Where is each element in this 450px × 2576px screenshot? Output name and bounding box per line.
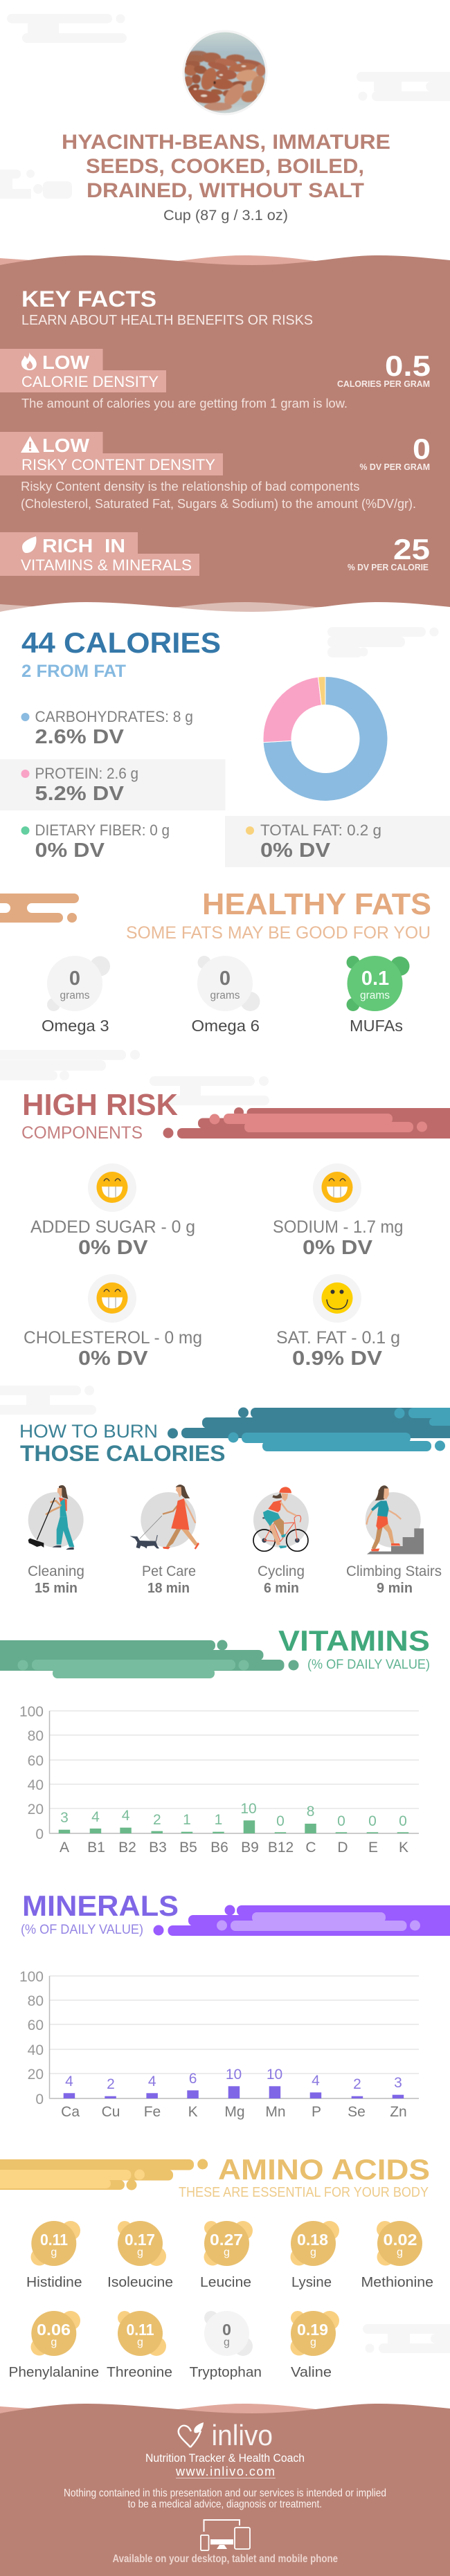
risk: cholesterol: CHOLESTEROL - 0 mg — [24, 1328, 202, 1348]
bar chart: minerals: 6 — [189, 2071, 197, 2087]
amino acid: methionine — [361, 2221, 433, 2290]
heading: those calories: THOSE CALORIES — [20, 1441, 226, 1466]
decoration: amino acids — [0, 2159, 208, 2190]
amino acid: histidine: 0.11 — [40, 2231, 68, 2249]
title: HYACINTH-BEANS, IMMATURE — [62, 131, 390, 154]
amino acid: lysine: Lysine — [291, 2275, 332, 2290]
bar chart: minerals: 4 — [312, 2073, 320, 2089]
macro: total fat — [225, 816, 450, 867]
bar chart: vitamins: B1 — [87, 1840, 105, 1856]
amino acid: histidine — [26, 2221, 82, 2290]
icon: warning triangle — [21, 436, 39, 453]
heading: minerals: MINERALS — [22, 1889, 179, 1922]
disclaimer: to be a medical advice, diagnosis or treatment. — [127, 2498, 322, 2510]
activity: pet care: 18 min — [147, 1581, 190, 1596]
bar chart: minerals: 80 — [28, 1993, 44, 2009]
fact: calorie density: CALORIES PER GRAM — [337, 379, 430, 389]
macro: total fat: TOTAL FAT: 0.2 g — [260, 822, 381, 839]
fat: omega 6: grams — [210, 990, 240, 1001]
bar chart: minerals: Ca — [61, 2104, 80, 2120]
risk: saturated fat: 0.9% DV — [292, 1348, 383, 1370]
macro: carbohydrates — [21, 708, 193, 748]
availability note: Available on your desktop, tablet and mobile phone — [112, 2553, 338, 2565]
icon: grinning face — [321, 1172, 353, 1203]
bar chart: minerals: 100 — [19, 1969, 44, 1985]
bar chart: minerals: 20 — [28, 2067, 44, 2083]
heading: amino acids: AMINO ACIDS — [218, 2153, 430, 2186]
fat: MUFAs: MUFAs — [350, 1017, 403, 1035]
macro: protein: 5.2% DV — [35, 783, 125, 805]
bar chart: vitamins: C — [305, 1840, 316, 1856]
bar chart: vitamins: 0 — [337, 1813, 345, 1829]
bar chart: vitamins: 1 — [215, 1812, 222, 1828]
activity: cleaning: Cleaning — [28, 1563, 84, 1579]
amino acid: histidine: g — [51, 2247, 57, 2258]
amino acid: valine: 0.19 — [297, 2321, 328, 2339]
fat: omega 3: 0 — [69, 968, 80, 990]
logo — [179, 2419, 273, 2451]
macro: protein: PROTEIN: 2.6 g — [35, 765, 138, 782]
fat: MUFAs — [346, 956, 410, 1035]
heading: calories: 44 CALORIES — [21, 626, 221, 659]
decoration: minerals — [154, 1905, 450, 1936]
heading: key facts: KEY FACTS — [21, 287, 156, 311]
website link: www.inlivo.com — [175, 2465, 275, 2478]
activity: climbing stairs: Climbing Stairs — [346, 1563, 442, 1579]
fact: rich in vitamins and minerals: VITAMINS & MINERALS — [21, 556, 192, 574]
icon: grinning face — [97, 1282, 127, 1314]
fact: risky content density: (Cholesterol, Saturated Fat, Sugars & Sodium) to the amount (%DV/gr). — [21, 497, 416, 511]
amino acid: tryptophan: 0 — [222, 2321, 231, 2339]
icon: grinning face — [97, 1172, 127, 1203]
risk: added sugar: ADDED SUGAR - 0 g — [30, 1217, 195, 1237]
bar chart: vitamins: 0 — [368, 1813, 377, 1829]
amino acid: lysine: 0.18 — [297, 2231, 328, 2249]
amino acid: threonine: g — [137, 2337, 143, 2348]
heading: high risk: HIGH RISK — [22, 1088, 178, 1122]
risk: saturated fat: SAT. FAT - 0.1 g — [276, 1328, 400, 1348]
bar chart: minerals: 3 — [394, 2075, 402, 2091]
bar chart: vitamins: B12 — [268, 1840, 294, 1856]
macro: carbohydrates: 2.6% DV — [35, 726, 125, 748]
amino acid: phenylalanine: Phenylalanine — [8, 2365, 99, 2380]
bar chart: minerals — [19, 1969, 419, 2120]
bar chart: vitamins: B3 — [149, 1840, 167, 1856]
bar chart: minerals: 4 — [148, 2074, 156, 2089]
serving size: Cup (87 g / 3.1 oz) — [163, 208, 288, 224]
activity: cleaning — [28, 1485, 84, 1596]
fact: rich in vitamins and minerals: RICH IN — [42, 535, 125, 556]
bar chart: vitamins: B6 — [210, 1840, 228, 1856]
amino acid: lysine — [291, 2221, 339, 2290]
subheading: calories from fat: 2 FROM FAT — [21, 662, 126, 681]
amino acid: phenylalanine: 0.06 — [37, 2321, 71, 2339]
bar chart: minerals: Zn — [390, 2104, 407, 2120]
bar chart: vitamins: K — [399, 1840, 408, 1856]
bar chart: vitamins: D — [337, 1840, 348, 1856]
donut chart — [263, 677, 388, 801]
panel: key facts — [0, 255, 450, 623]
subheading: healthy fats: SOME FATS MAY BE GOOD FOR YOU — [126, 923, 431, 943]
bar chart: vitamins: 1 — [183, 1812, 191, 1828]
bar chart: vitamins: B9 — [241, 1840, 259, 1856]
activity: climbing stairs: 9 min — [377, 1581, 413, 1596]
amino acid: lysine: g — [310, 2247, 316, 2258]
amino acid: threonine: Threonine — [107, 2365, 172, 2380]
bar chart: minerals: 10 — [226, 2067, 242, 2083]
disclaimer: Nothing contained in this presentation and our services is intended or implied — [64, 2487, 386, 2499]
amino acid: leucine: g — [224, 2247, 230, 2258]
bar chart: vitamins: B5 — [179, 1840, 197, 1856]
amino acid: leucine: 0.27 — [210, 2231, 243, 2249]
risk: sodium: SODIUM - 1.7 mg — [273, 1217, 403, 1237]
panel: footer — [0, 2404, 450, 2576]
icon: smiling face — [321, 1282, 353, 1314]
activity: cleaning: 15 min — [35, 1581, 78, 1596]
fact: rich in vitamins and minerals: 25 — [393, 533, 430, 565]
amino acid: valine: g — [310, 2337, 316, 2348]
amino acid: valine: Valine — [291, 2365, 332, 2380]
bar chart: minerals: Mn — [265, 2104, 286, 2120]
bar chart: vitamins: 3 — [60, 1810, 69, 1826]
risk: cholesterol — [24, 1274, 202, 1370]
bar chart: minerals: 10 — [267, 2067, 282, 2083]
fat: MUFAs: 0.1 — [361, 968, 389, 990]
heading: healthy fats: HEALTHY FATS — [202, 887, 431, 921]
fat: omega 6: Omega 6 — [191, 1017, 260, 1035]
disclaimer — [64, 2487, 386, 2510]
amino acid: leucine: Leucine — [200, 2275, 251, 2290]
macro: carbohydrates: CARBOHYDRATES: 8 g — [35, 708, 193, 725]
amino acid: phenylalanine: g — [51, 2337, 57, 2348]
bar chart: vitamins: 60 — [28, 1753, 44, 1769]
fact: rich in vitamins and minerals: % DV PER CALORIE — [348, 562, 429, 572]
amino acid: isoleucine — [107, 2221, 173, 2290]
bar chart: vitamins: 20 — [28, 1802, 44, 1817]
fact: risky content density — [0, 432, 431, 511]
macro: dietary fiber — [21, 822, 170, 862]
fact: risky content density: 0 — [413, 433, 431, 465]
fact: calorie density: CALORIE DENSITY — [21, 373, 159, 390]
decoration: healthy fats — [0, 894, 79, 923]
fact: risky content density: Risky Content density is the relationship of bad components — [21, 480, 360, 493]
title: DRAINED, WITHOUT SALT — [87, 179, 364, 202]
fat: omega 6 — [191, 956, 260, 1035]
bar chart: minerals: Mg — [224, 2104, 245, 2120]
bar chart: minerals: Se — [348, 2104, 366, 2120]
bar chart: minerals: 0 — [35, 2092, 44, 2107]
bar chart: vitamins: 4 — [122, 1808, 130, 1824]
bar chart: vitamins: 0 — [399, 1813, 407, 1829]
activity: pet care: Pet Care — [142, 1563, 196, 1579]
fat: MUFAs: grams — [360, 990, 390, 1001]
amino acid: methionine: Methionine — [361, 2275, 433, 2290]
title — [62, 131, 390, 202]
subheading: vitamins percent of daily value: (% OF DAILY VALUE) — [307, 1658, 430, 1672]
decoration: burn calories — [168, 1408, 450, 1451]
macro: dietary fiber: DIETARY FIBER: 0 g — [35, 822, 170, 839]
subheading: amino acids: THESE ARE ESSENTIAL FOR YOUR BODY — [179, 2185, 429, 2200]
bar chart: vitamins — [19, 1704, 419, 1856]
activity: climbing stairs — [346, 1485, 442, 1596]
amino acid: histidine: Histidine — [26, 2275, 82, 2290]
amino acid: isoleucine: g — [137, 2247, 143, 2258]
bar chart: vitamins: B2 — [118, 1840, 136, 1856]
bar chart: minerals: 40 — [28, 2042, 44, 2058]
bar chart: vitamins: 100 — [19, 1704, 44, 1720]
activity: cycling: 6 min — [264, 1581, 299, 1596]
fat: omega 3: Omega 3 — [42, 1017, 109, 1035]
amino acid: isoleucine: Isoleucine — [107, 2275, 173, 2290]
icon: leaf — [22, 536, 36, 553]
macro: dietary fiber: 0% DV — [35, 840, 105, 862]
fact: calorie density: 0.5 — [385, 350, 431, 382]
amino acid: tryptophan: Tryptophan — [190, 2365, 262, 2380]
fat: omega 6: 0 — [219, 968, 231, 990]
bar chart: vitamins: 0 — [276, 1813, 285, 1829]
fact: calorie density — [0, 349, 431, 410]
fact: calorie density: The amount of calories you are getting from 1 gram is low. — [21, 397, 348, 410]
risk: saturated fat — [276, 1274, 400, 1370]
heading: vitamins: VITAMINS — [278, 1624, 430, 1657]
risk: sodium: 0% DV — [303, 1237, 373, 1259]
fat: omega 3: grams — [60, 990, 90, 1001]
activity: pet care — [130, 1485, 199, 1596]
macro: protein — [0, 759, 226, 810]
bar chart: vitamins: A — [60, 1840, 69, 1856]
subheading: components: COMPONENTS — [21, 1123, 143, 1143]
icon: flame — [21, 352, 37, 370]
amino acid: tryptophan — [190, 2311, 262, 2380]
risk: added sugar — [30, 1163, 195, 1259]
bar chart: vitamins: 8 — [307, 1804, 314, 1820]
amino acid: leucine — [200, 2221, 253, 2290]
amino acid: isoleucine: 0.17 — [125, 2231, 155, 2249]
bar chart: minerals: K — [188, 2104, 198, 2120]
bar chart: vitamins: 10 — [240, 1801, 257, 1817]
amino acid: valine — [291, 2311, 339, 2380]
amino acid: tryptophan: g — [224, 2337, 230, 2348]
tagline: Nutrition Tracker & Health Coach — [145, 2451, 305, 2465]
bar chart: minerals: 4 — [65, 2074, 73, 2089]
fact: risky content density: % DV PER GRAM — [360, 462, 430, 472]
macro: total fat: 0% DV — [260, 840, 331, 862]
bar chart: minerals: P — [312, 2104, 321, 2120]
risk: sodium — [273, 1163, 403, 1259]
fact: rich in vitamins and minerals — [0, 532, 430, 576]
bar chart: minerals: 2 — [353, 2076, 361, 2092]
decoration: vitamins — [0, 1640, 299, 1678]
risk: cholesterol: 0% DV — [78, 1348, 148, 1370]
amino acid: threonine — [107, 2311, 172, 2380]
fat: omega 3 — [42, 956, 110, 1035]
amino acid: methionine: g — [397, 2247, 403, 2258]
bar chart: minerals: 60 — [28, 2017, 44, 2033]
activity: cycling: Cycling — [258, 1563, 305, 1579]
heading: how to burn: HOW TO BURN — [19, 1421, 158, 1442]
decoration: high risk — [163, 1107, 450, 1139]
food photo: beans — [183, 30, 267, 115]
title: SEEDS, COOKED, BOILED, — [86, 155, 364, 178]
bar chart: vitamins: 80 — [28, 1728, 44, 1744]
amino acid: phenylalanine — [8, 2311, 99, 2380]
icon: devices — [201, 2520, 250, 2550]
bar chart: vitamins: E — [368, 1840, 378, 1856]
subheading: minerals percent of daily value: (% OF DAILY VALUE) — [21, 1923, 143, 1937]
bar chart: vitamins: 40 — [28, 1777, 44, 1793]
logo: inlivo — [212, 2419, 273, 2451]
activity: cycling — [253, 1487, 309, 1596]
bar chart: vitamins: 0 — [35, 1826, 44, 1842]
amino acid: methionine: 0.02 — [384, 2231, 417, 2249]
bar chart: minerals: 2 — [107, 2076, 115, 2092]
fact: risky content density: LOW — [42, 435, 90, 456]
fact: calorie density: LOW — [42, 352, 90, 373]
amino acid: threonine: 0.11 — [126, 2321, 154, 2339]
bar chart: vitamins: 2 — [153, 1812, 161, 1828]
risk: added sugar: 0% DV — [78, 1237, 148, 1259]
bar chart: minerals: Cu — [102, 2104, 120, 2120]
bar chart: minerals: Fe — [144, 2104, 161, 2120]
fact: risky content density: RISKY CONTENT DENSITY — [21, 456, 215, 473]
bar chart: vitamins: 4 — [91, 1809, 100, 1825]
subheading: key facts: LEARN ABOUT HEALTH BENEFITS OR RISKS — [21, 313, 313, 328]
